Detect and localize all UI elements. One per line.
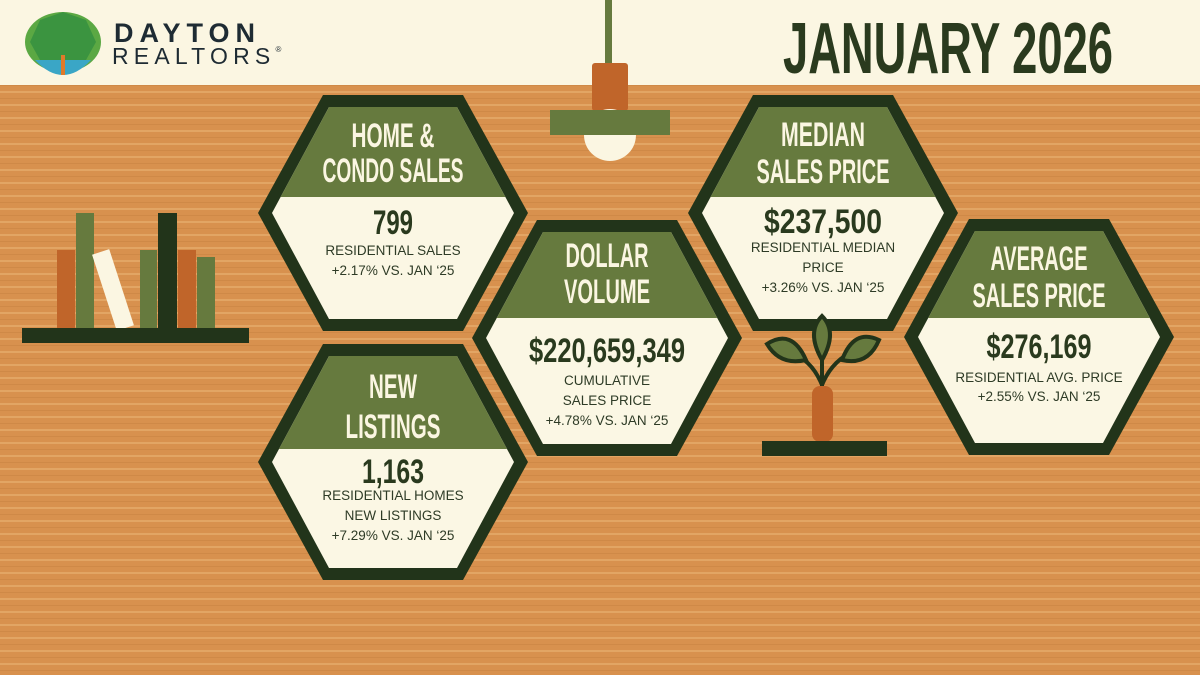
heading: NEW: [369, 368, 418, 406]
text: description: NEW LISTINGS: [345, 508, 441, 523]
heading: CONDO SALES: [322, 152, 464, 190]
heading: HOME &: [352, 117, 434, 155]
heading: MEDIAN: [781, 116, 865, 154]
text: description: +7.29% VS. JAN ‘25: [332, 528, 454, 543]
value: 799: [373, 204, 413, 242]
heading: VOLUME: [564, 273, 650, 311]
heading: [756, 116, 890, 191]
text: description: +4.78% VS. JAN ‘25: [546, 413, 668, 428]
brand name: [112, 18, 287, 69]
heading: LISTINGS: [346, 408, 440, 446]
text: description: CUMULATIVE: [564, 373, 650, 388]
icon: tree: [25, 12, 101, 75]
text: description: RESIDENTIAL MEDIAN: [751, 240, 895, 255]
text: description: RESIDENTIAL AVG. PRICE: [955, 370, 1123, 385]
text: description: RESIDENTIAL SALES: [325, 243, 461, 258]
heading: [972, 240, 1106, 315]
panel: average sales price: [904, 219, 1174, 455]
value: 1,163: [362, 453, 424, 491]
text: description: +2.55% VS. JAN ‘25: [978, 389, 1100, 404]
icon: bookshelf: [22, 213, 249, 343]
brand name: ®: [275, 45, 287, 54]
panel: median sales price: [688, 95, 958, 331]
brand name: REALTORS: [112, 43, 275, 69]
panel: new listings: [258, 344, 528, 580]
text: description: +2.17% VS. JAN ‘25: [332, 263, 454, 278]
icon: hanging lamp: [550, 0, 670, 161]
heading: [564, 237, 650, 311]
brand name: DAYTON: [114, 18, 261, 48]
text: description: PRICE: [802, 260, 844, 275]
value: $220,659,349: [529, 332, 685, 370]
panel: dollar volume: [472, 220, 742, 456]
icon: plant: [762, 316, 887, 456]
heading: DOLLAR: [566, 237, 648, 275]
heading: SALES PRICE: [756, 153, 890, 191]
heading: AVERAGE: [990, 240, 1088, 278]
text: description: SALES PRICE: [563, 393, 651, 408]
heading: [322, 117, 464, 190]
logo: [25, 12, 287, 75]
heading: [346, 368, 440, 446]
value: $276,169: [986, 328, 1092, 366]
text: description: +3.26% VS. JAN ‘25: [762, 280, 884, 295]
value: $237,500: [764, 203, 882, 241]
panel: home & condo sales: [258, 95, 528, 331]
heading: SALES PRICE: [972, 277, 1106, 315]
text: description: RESIDENTIAL HOMES: [322, 488, 464, 503]
header bar: [0, 0, 1200, 85]
